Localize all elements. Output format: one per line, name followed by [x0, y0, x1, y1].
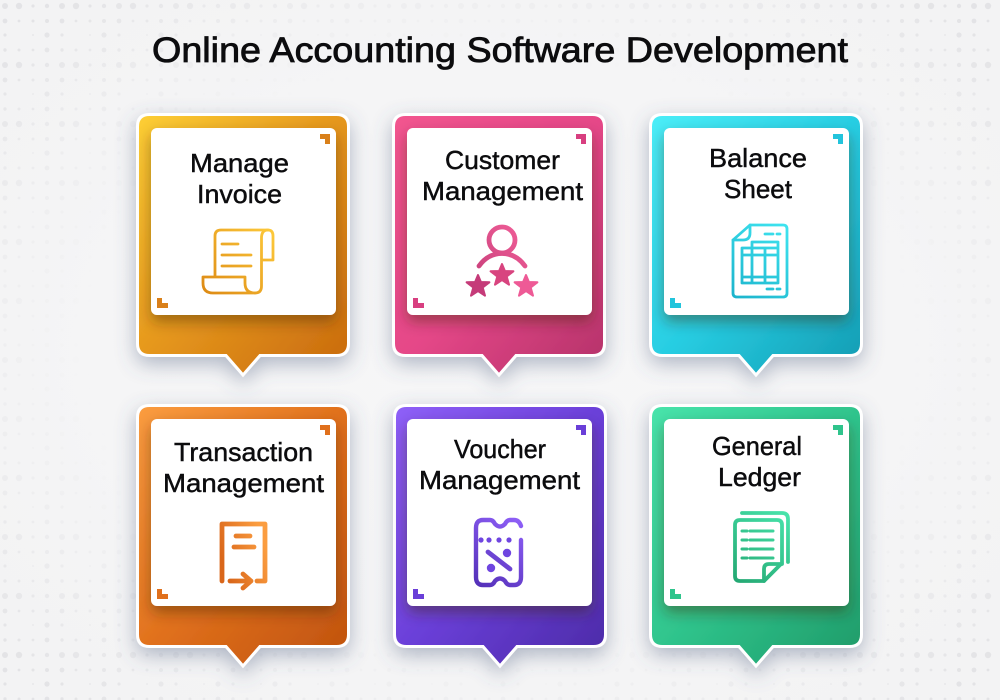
heading: General — [712, 431, 802, 461]
card body — [394, 114, 604, 375]
corner marks — [413, 425, 586, 599]
heading: Management — [419, 465, 581, 495]
icon: customer with stars — [467, 227, 537, 296]
icon: voucher ticket — [476, 520, 521, 585]
white panel — [151, 419, 336, 606]
card body — [138, 406, 348, 666]
card body — [394, 406, 606, 666]
icon: invoice scroll — [203, 230, 273, 293]
title: Online Accounting Software Development — [152, 31, 848, 70]
corner marks — [157, 134, 330, 308]
heading — [709, 143, 807, 204]
heading: Ledger — [718, 462, 801, 492]
white panel — [407, 419, 592, 606]
corner marks — [670, 425, 843, 599]
panel: Customer Management — [394, 114, 604, 375]
heading — [419, 434, 581, 495]
heading: Management — [422, 176, 584, 206]
panel: Transaction Management — [138, 406, 348, 666]
heading — [422, 145, 584, 206]
panel: Voucher Management — [394, 406, 606, 666]
corner marks — [157, 425, 330, 599]
heading: Invoice — [197, 179, 282, 209]
panel: Manage Invoice — [138, 114, 348, 375]
white panel — [664, 419, 849, 606]
panel: Balance Sheet — [650, 114, 862, 375]
heading: Transaction — [174, 437, 313, 467]
white panel — [151, 128, 336, 315]
heading — [712, 431, 802, 492]
heading: Management — [163, 468, 325, 498]
icon: transaction document with arrow — [222, 524, 265, 588]
white panel — [407, 128, 592, 315]
heading: Balance — [709, 143, 807, 173]
card body — [650, 406, 862, 666]
icon: ledger pages — [735, 513, 788, 581]
corner marks — [670, 134, 843, 308]
heading: Voucher — [454, 434, 546, 464]
corner marks — [413, 134, 586, 308]
white panel — [664, 128, 849, 315]
heading — [163, 437, 325, 498]
card body — [138, 114, 348, 375]
panel: General Ledger — [650, 406, 862, 666]
heading — [190, 148, 289, 209]
heading: Sheet — [724, 174, 793, 204]
heading: Customer — [445, 145, 560, 175]
heading: Manage — [190, 148, 289, 178]
card body — [650, 114, 862, 375]
icon: balance sheet document — [733, 225, 787, 297]
